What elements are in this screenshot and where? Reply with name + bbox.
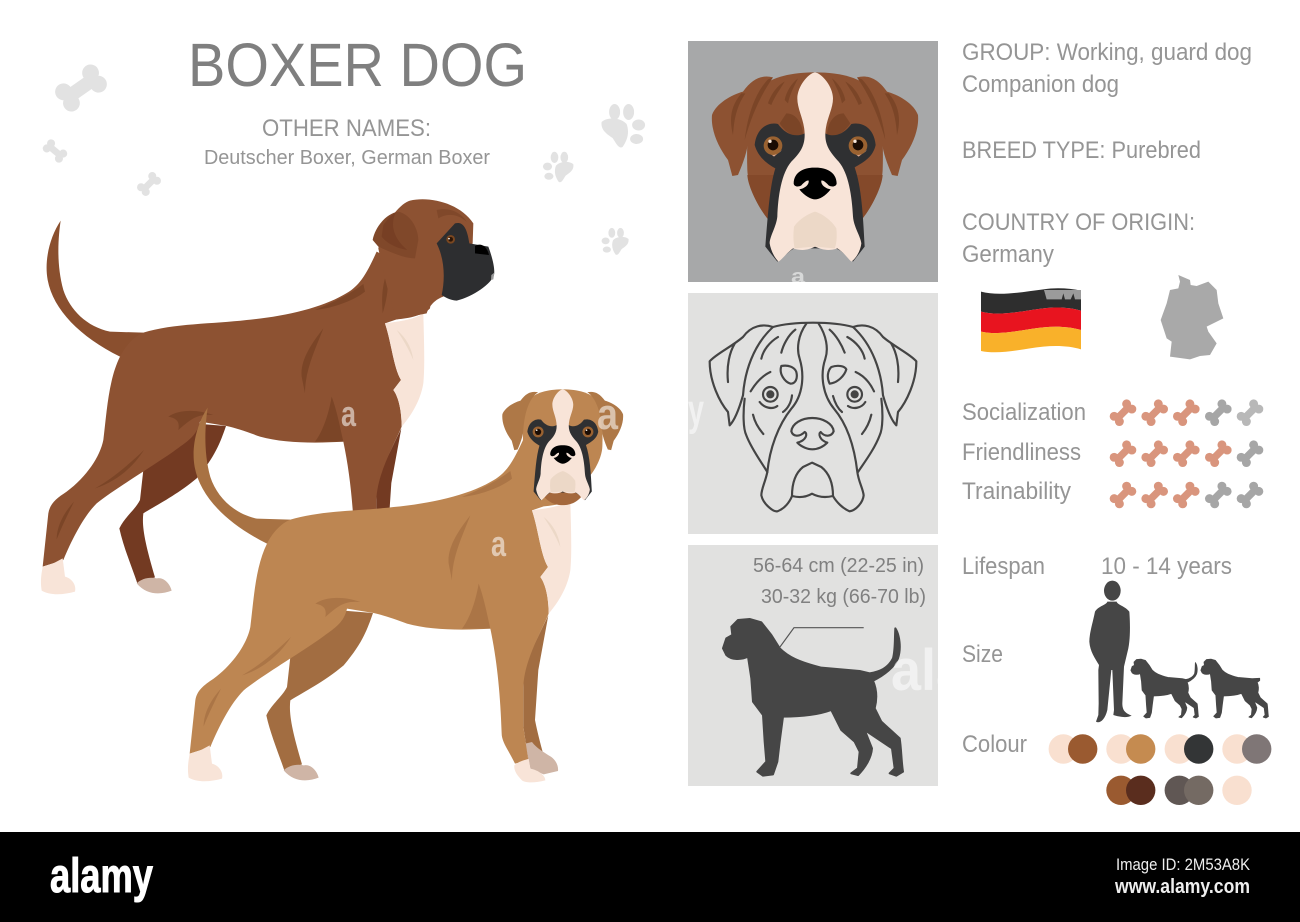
title: BOXER DOG bbox=[188, 31, 527, 99]
icon: small dog with tail bbox=[1131, 659, 1198, 718]
size comparison silhouettes bbox=[1089, 581, 1268, 722]
panel: silhouette and measurements bbox=[688, 545, 938, 786]
lifespan: 10 - 14 years bbox=[1101, 553, 1232, 580]
dog: brown boxer, side view bbox=[41, 199, 494, 594]
group text: GROUP: Working, guard dog bbox=[962, 39, 1252, 66]
icon: small dog, docked tail bbox=[1201, 659, 1268, 718]
height text: 56-64 cm (22-25 in) bbox=[753, 555, 924, 577]
group text: Companion dog bbox=[962, 71, 1119, 98]
other names: OTHER NAMES: bbox=[262, 115, 431, 142]
footer logo: alamy bbox=[50, 850, 153, 903]
colour label: Colour bbox=[962, 731, 1027, 758]
icon: boxer head line drawing bbox=[710, 323, 916, 511]
watermark fragments on panels: a bbox=[791, 266, 806, 288]
icon: human silhouette bbox=[1089, 581, 1132, 722]
country of origin text bbox=[962, 209, 1195, 268]
size label: Size bbox=[962, 641, 1003, 668]
colour swatches bbox=[1049, 734, 1271, 805]
watermark fragments on panels bbox=[688, 266, 967, 703]
watermark letters on dogs bbox=[341, 390, 618, 564]
rating labels: Socialization bbox=[962, 399, 1086, 426]
rating bones: socialization 3 of 5 bbox=[1108, 398, 1265, 428]
group text bbox=[962, 39, 1252, 98]
breed type text: BREED TYPE: Purebred bbox=[962, 137, 1201, 164]
dog: fawn boxer, front-facing head bbox=[188, 408, 580, 782]
icon: dog silhouette bbox=[723, 619, 903, 776]
watermark fragments on panels: ala bbox=[891, 638, 967, 703]
rating labels: Friendliness bbox=[962, 439, 1081, 466]
lifespan: Lifespan bbox=[962, 553, 1045, 580]
icon: map of germany bbox=[1161, 275, 1223, 359]
lifespan bbox=[962, 553, 1232, 580]
country of origin text: COUNTRY OF ORIGIN: bbox=[962, 209, 1195, 236]
rating labels: Trainability bbox=[962, 478, 1071, 505]
dog head: fawn boxer bbox=[502, 389, 623, 505]
other names: Deutscher Boxer, German Boxer bbox=[204, 147, 490, 169]
rating labels bbox=[962, 399, 1086, 505]
other names bbox=[204, 115, 490, 169]
country of origin text: Germany bbox=[962, 241, 1054, 268]
footer bar bbox=[0, 832, 1300, 922]
watermark letters on dogs: a bbox=[597, 390, 618, 439]
rating bones: friendliness 4 of 5 bbox=[1108, 439, 1265, 469]
decorative bones and paws bbox=[41, 61, 645, 255]
icon: boxer head in colour bbox=[712, 72, 918, 262]
watermark letters on dogs: a bbox=[341, 393, 357, 434]
website: www.alamy.com bbox=[1114, 876, 1250, 898]
image id: Image ID: 2M53A8K bbox=[1116, 855, 1251, 874]
panel: outline head bbox=[688, 293, 938, 534]
rating bones: trainability 3 of 5 bbox=[1108, 480, 1265, 510]
icon: german flag bbox=[981, 288, 1081, 352]
panel: coloured head bbox=[688, 41, 938, 282]
measurement leader line bbox=[780, 628, 864, 647]
watermark letters on dogs: a bbox=[491, 523, 507, 564]
weight text: 30-32 kg (66-70 lb) bbox=[761, 586, 926, 608]
watermark fragments on panels: y bbox=[688, 386, 704, 435]
